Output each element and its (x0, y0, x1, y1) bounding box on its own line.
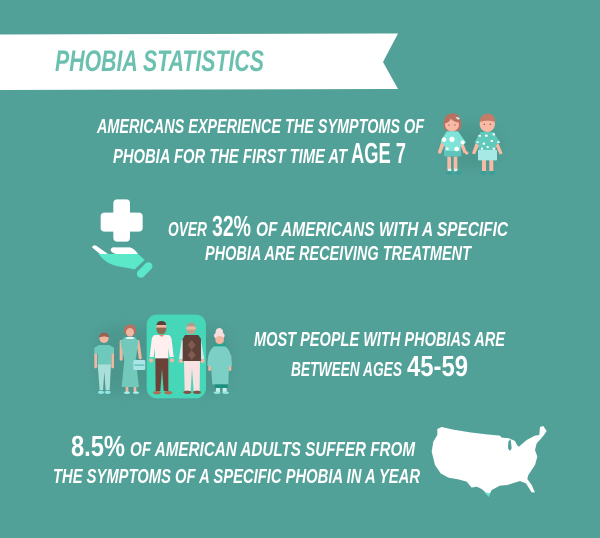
stat: 8.5% of adults: 8.5% (71, 431, 125, 463)
stat: 32% receiving treatment: PHOBIA ARE RECEIVING TREATMENT (205, 243, 472, 265)
stat: first symptoms at age 7: AGE 7 (351, 138, 406, 170)
stat: 32% receiving treatment: OVER (168, 219, 207, 241)
older man with vest (179, 323, 205, 394)
stat: ages 45-59: 45-59 (407, 351, 468, 383)
stat: 32% receiving treatment: 32% (212, 211, 251, 243)
stat: 8.5% of adults (53, 431, 420, 488)
grandmother (207, 328, 232, 394)
stat: first symptoms at age 7 (96, 116, 425, 170)
stat: 32% receiving treatment (168, 211, 508, 265)
icon: hand holding medical cross (92, 199, 154, 279)
woman with bag (120, 324, 145, 394)
icon: two children (438, 113, 503, 175)
teen (94, 333, 114, 394)
title: PHOBIA STATISTICS (55, 45, 264, 78)
icon: people of different ages (94, 315, 232, 398)
stat: ages 45-59 (254, 329, 505, 383)
girl (438, 113, 468, 175)
stat: ages 45-59: MOST PEOPLE WITH PHOBIAS ARE (254, 329, 505, 351)
cross (101, 199, 143, 242)
stat: ages 45-59: BETWEEN AGES (291, 359, 402, 381)
stat: 8.5% of adults: OF AMERICAN ADULTS SUFFER FROM (130, 439, 416, 461)
man with beard (149, 321, 174, 394)
hand (92, 245, 154, 279)
boy (472, 114, 503, 175)
title banner (0, 34, 398, 90)
stat: first symptoms at age 7: PHOBIA FOR THE FIRST TIME AT (113, 146, 348, 168)
stat: 8.5% of adults: THE SYMPTOMS OF A SPECIFIC PHOBIA IN A YEAR (53, 466, 420, 488)
stat: first symptoms at age 7: AMERICANS EXPERIENCE THE SYMPTOMS OF (96, 116, 425, 138)
stat: 32% receiving treatment: OF AMERICANS WITH A SPECIFIC (256, 219, 508, 241)
icon: map of the United States (432, 426, 547, 497)
highlight panel (147, 315, 206, 398)
ribbon (0, 34, 398, 90)
